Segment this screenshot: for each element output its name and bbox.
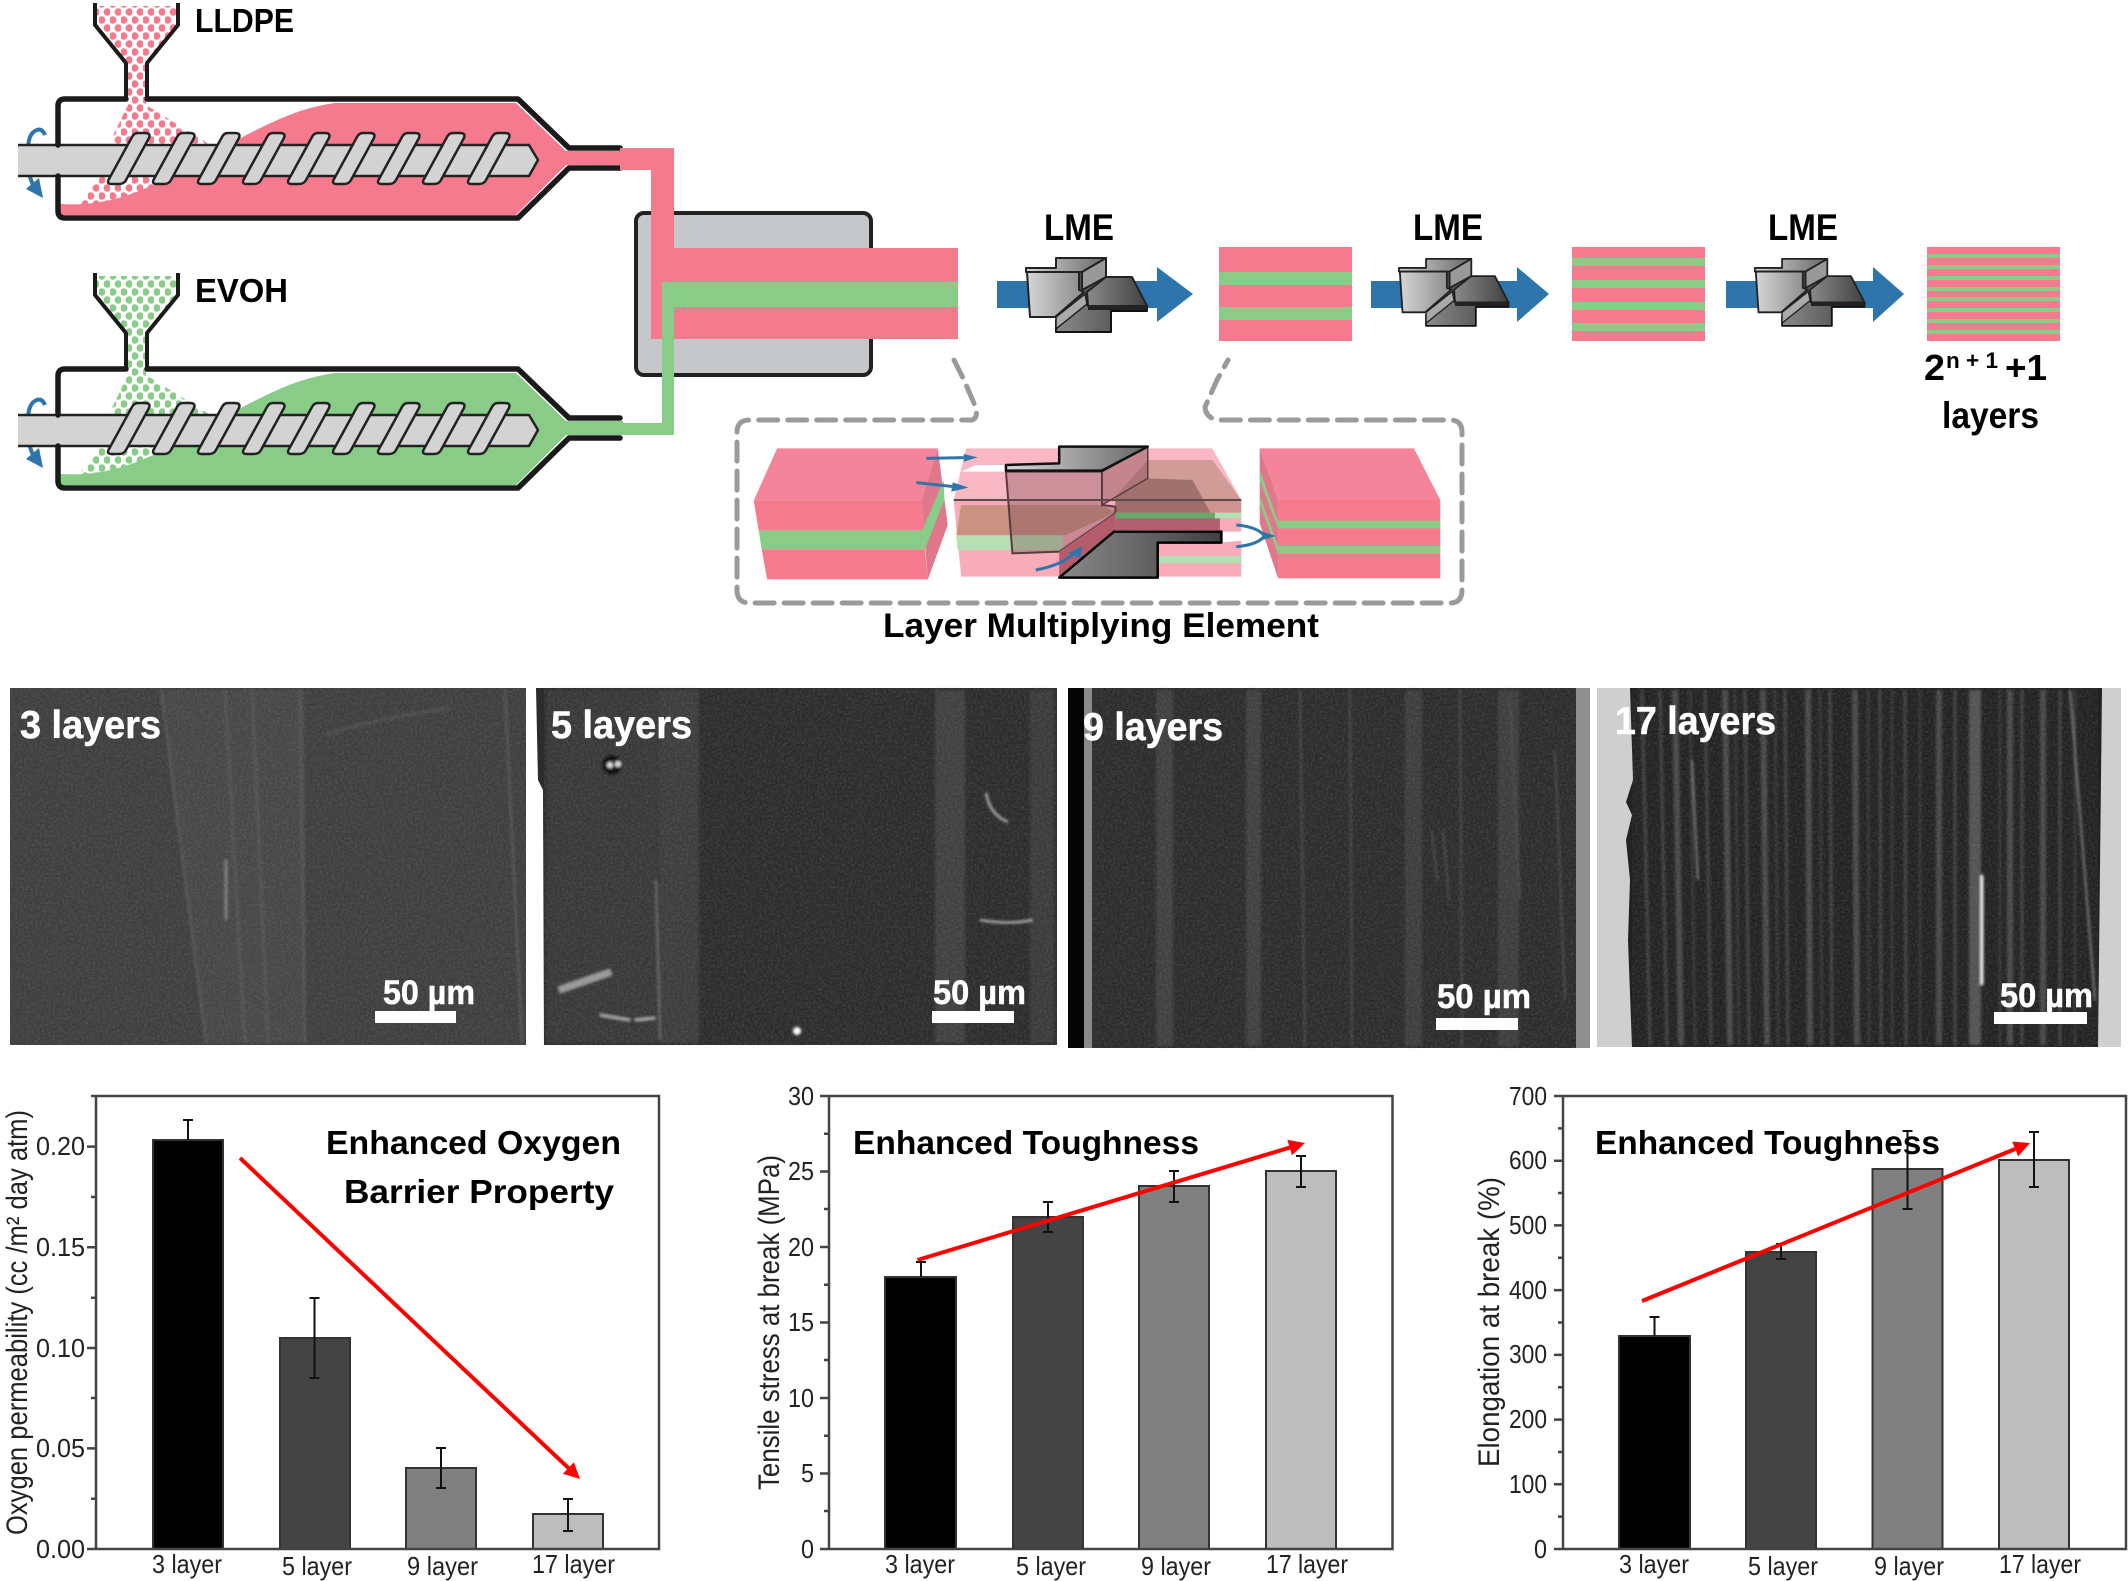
label: LLDPE: LLDPE: [195, 2, 294, 39]
right block: [1260, 448, 1440, 578]
chart heading: [326, 1124, 621, 1210]
micrograph: 17 layers: [1597, 688, 2121, 1047]
extruder: EVOH: [18, 273, 623, 488]
error bars: [1650, 1131, 2039, 1336]
y ticks: 0: [801, 1534, 814, 1564]
scale bar: [375, 1011, 456, 1023]
dashed callout frame: [737, 360, 1462, 603]
y axis title: Elongation at break (%): [1473, 1177, 1506, 1467]
x labels: 5 layer: [1748, 1551, 1818, 1581]
formula: layers count: [1924, 347, 2047, 436]
y ticks: 700: [1509, 1081, 1547, 1111]
element icon: [1026, 258, 1147, 332]
y ticks: 300: [1509, 1339, 1547, 1369]
blue arrow: [1371, 267, 1549, 322]
melt: EVOH: [60, 373, 623, 485]
formula: layers count: layers: [1942, 395, 2039, 436]
y ticks: 10: [788, 1383, 814, 1413]
micrograph: 5 layers: [536, 688, 1057, 1045]
label: 9 layers: [1083, 706, 1223, 749]
scale label: 50 µm: [2000, 977, 2093, 1015]
chart: oxygen permeability: [1, 1096, 659, 1581]
pellets: LLDPE: [78, 6, 212, 205]
inset: layer multiplying element: [754, 447, 1440, 579]
error bars: [183, 1120, 573, 1531]
x labels: 17 layer: [532, 1549, 615, 1579]
y ticks: 20: [788, 1232, 814, 1262]
bars: [1619, 1160, 2069, 1549]
chart: elongation: [1473, 1081, 2126, 1581]
LME step 1: [997, 207, 1193, 332]
y ticks: 200: [1509, 1404, 1547, 1434]
element icon: [1755, 259, 1864, 326]
formula: layers count: +1: [2005, 347, 2047, 388]
trend arrow: [918, 1140, 1305, 1260]
y ticks: [36, 1131, 85, 1564]
chart heading: Enhanced Toughness: [1595, 1124, 1940, 1161]
bars: [885, 1171, 1336, 1549]
x labels: 9 layer: [407, 1551, 478, 1581]
x labels: 3 layer: [1619, 1549, 1689, 1579]
y ticks: 30: [788, 1081, 814, 1111]
micrograph: 3 layers: [10, 688, 526, 1045]
y ticks: 0: [1534, 1534, 1547, 1564]
axes frame: [1554, 1096, 2126, 1549]
x labels: [1619, 1549, 2081, 1581]
y ticks: 600: [1509, 1145, 1547, 1175]
y ticks: 0.20: [36, 1131, 85, 1161]
scale bar: [1994, 1012, 2087, 1024]
LME step 3: [1726, 207, 1904, 326]
scale label: 50 µm: [1437, 978, 1531, 1016]
x labels: [152, 1549, 615, 1581]
pellets: EVOH: [78, 276, 212, 475]
axes frame: [820, 1096, 1392, 1549]
extruder: LLDPE: [18, 3, 623, 218]
17-layer stack: [1927, 247, 2060, 341]
LME step 2: [1371, 207, 1549, 326]
bars: [153, 1140, 603, 1549]
scale bar: [932, 1011, 1014, 1023]
label: 3 layers: [20, 704, 161, 747]
label: LME: [1413, 207, 1483, 248]
chart heading: Enhanced Oxygen: [326, 1124, 621, 1161]
x labels: [885, 1549, 1348, 1581]
x labels: 17 layer: [1999, 1549, 2081, 1579]
formula: layers count: n + 1: [1946, 348, 1998, 373]
x labels: 9 layer: [1874, 1551, 1944, 1581]
label: LME: [1044, 207, 1114, 248]
flow arrows: [916, 454, 1276, 570]
melt: LLDPE: [60, 103, 623, 215]
blue arrow: [997, 267, 1193, 322]
green pipe: [620, 282, 958, 435]
rotation arrow: [26, 400, 45, 468]
hopper: [95, 3, 178, 99]
label: EVOH: EVOH: [195, 272, 288, 309]
trend arrow: [240, 1158, 580, 1479]
y ticks: 400: [1509, 1275, 1547, 1305]
chart heading: Barrier Property: [344, 1173, 615, 1210]
screw: [18, 133, 538, 184]
chart heading: Enhanced Toughness: [853, 1124, 1199, 1161]
y ticks: [1509, 1081, 1547, 1564]
error bars: [916, 1156, 1306, 1277]
micrograph: 9 layers: [1068, 688, 1590, 1048]
x labels: 5 layer: [1016, 1551, 1086, 1581]
barrel outline: [58, 99, 620, 218]
y ticks: 25: [788, 1156, 814, 1186]
9-layer stack: [1572, 247, 1705, 341]
label: 17 layers: [1615, 700, 1776, 743]
label: LME: [1768, 207, 1838, 248]
label: 5 layers: [551, 704, 692, 747]
pipe and 3-layer stack: [620, 148, 958, 435]
y ticks: 0.10: [36, 1333, 85, 1363]
hopper: [95, 273, 178, 369]
x labels: 3 layer: [152, 1549, 222, 1579]
formula: layers count: 2: [1924, 347, 1945, 388]
y ticks: 5: [801, 1458, 814, 1488]
inset caption: Layer Multiplying Element: [883, 607, 1319, 645]
y axis title: Oxygen permeability (cc /m² day atm): [1, 1110, 34, 1535]
y ticks: 100: [1509, 1469, 1547, 1499]
axes frame: [87, 1096, 659, 1549]
chart: tensile stress: [753, 1081, 1392, 1581]
scale label: 50 µm: [383, 974, 475, 1012]
rotation arrow: [26, 130, 45, 198]
screw: [18, 403, 538, 454]
5-layer stack: [1219, 247, 1352, 341]
pink pipe: [620, 148, 958, 339]
barrel outline: [58, 369, 620, 488]
y ticks: 0.05: [36, 1433, 85, 1463]
x labels: 5 layer: [282, 1551, 352, 1581]
y ticks: 15: [788, 1307, 814, 1337]
x labels: 9 layer: [1141, 1551, 1211, 1581]
trend arrow: [1642, 1142, 2030, 1301]
gray feedblock: [636, 213, 871, 375]
y axis title: Tensile stress at break (MPa): [753, 1155, 786, 1490]
left block: [754, 448, 948, 579]
blue arrow: [1726, 267, 1904, 322]
x labels: 17 layer: [1266, 1549, 1348, 1579]
scale bar: [1436, 1018, 1518, 1030]
x labels: 3 layer: [885, 1549, 955, 1579]
element icon: [1399, 259, 1508, 326]
y ticks: 0.15: [36, 1232, 85, 1262]
y ticks: [788, 1081, 814, 1564]
y ticks: 0.00: [36, 1534, 85, 1564]
scale label: 50 µm: [933, 974, 1026, 1012]
middle element: [954, 447, 1241, 578]
y ticks: 500: [1509, 1210, 1547, 1240]
